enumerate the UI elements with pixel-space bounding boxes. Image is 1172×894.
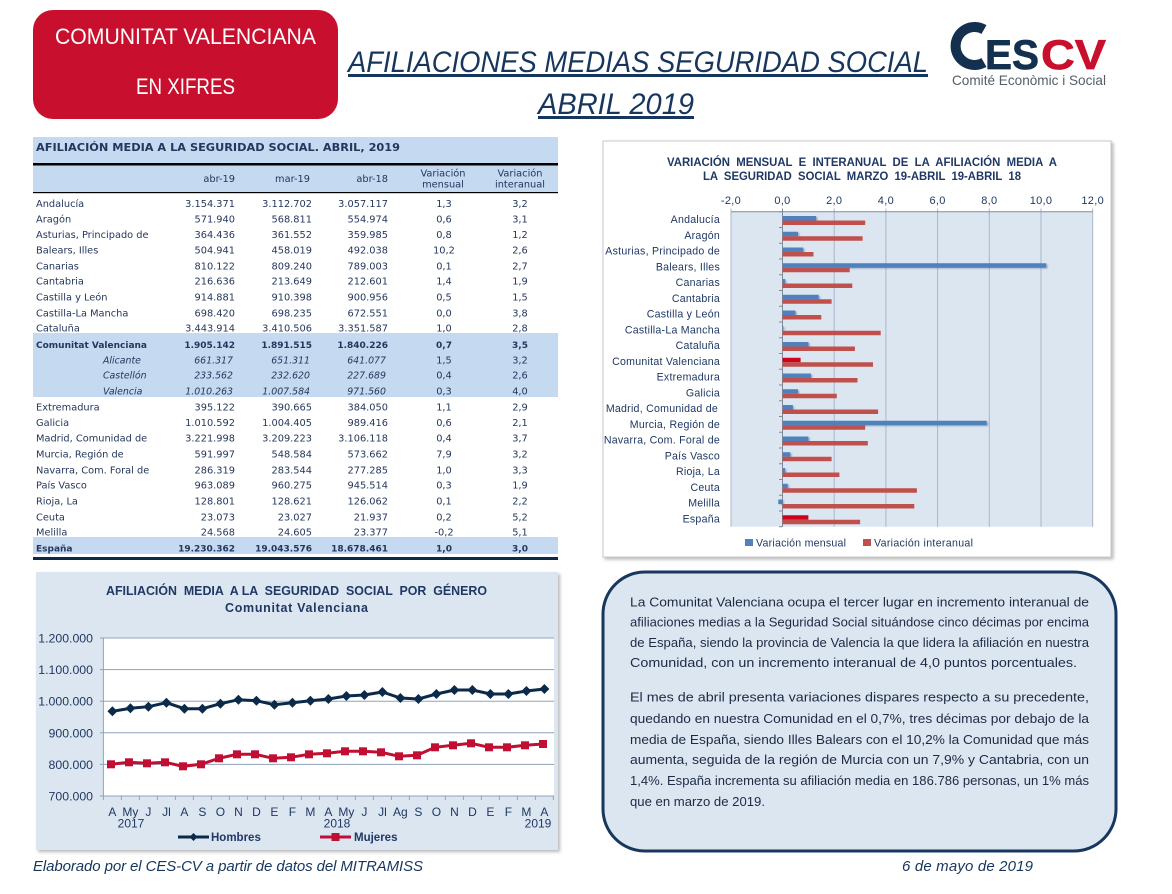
- table rows: España: [36, 544, 73, 554]
- bar chart category labels: Madrid, Comunidad de: [606, 403, 718, 415]
- table title: AFILIACIÓN MEDIA A LA SEGURIDAD SOCIAL. ABRIL, 2019: [36, 141, 400, 154]
- table rows: Alicante: [102, 356, 141, 366]
- table rows: 1,9: [512, 276, 528, 288]
- line chart x axis labels: Jl: [378, 805, 387, 819]
- bars: variación interanual: [782, 220, 917, 524]
- paragraph 2: [630, 690, 1090, 809]
- table rows: 554.974: [347, 214, 388, 226]
- line: Mujeres: [111, 743, 543, 766]
- table column headers: [203, 168, 545, 190]
- table rows: 2,6: [512, 246, 528, 256]
- table rows: Comunitat Valenciana: [36, 341, 147, 351]
- line chart x axis labels: Jl: [162, 805, 171, 819]
- highlighted bars: Comunitat Valenciana and España: [782, 358, 808, 520]
- bar chart category labels: Comunitat Valenciana: [612, 356, 720, 368]
- table rows: 3.106.118: [338, 434, 388, 444]
- table rows: 1.010.263: [185, 386, 233, 398]
- bar chart value axis labels: 2,0: [826, 195, 842, 207]
- bar chart legend: [745, 538, 973, 550]
- table rows: 568.811: [271, 214, 312, 226]
- table rows: 3.410.506: [262, 324, 312, 334]
- line chart x axis labels: [108, 805, 552, 830]
- table rows: 0,3: [436, 386, 452, 398]
- table rows: 1,1: [436, 402, 452, 414]
- paragraph 1: Comunidad, con un incremento interanual de 4,0 puntos porcentuales.: [630, 655, 1077, 670]
- table rows: Castilla y León: [36, 292, 108, 304]
- table rows: 1,4: [436, 276, 452, 288]
- table rows: Asturias, Principado de: [36, 230, 149, 241]
- line chart x axis labels: S: [414, 805, 422, 819]
- table rows: 7,9: [436, 450, 452, 460]
- table column headers: Variación: [420, 168, 466, 180]
- table rows: 361.552: [271, 230, 312, 241]
- bar chart value axis labels: -2,0: [721, 195, 741, 207]
- table rows: 0,0: [436, 308, 452, 320]
- table rows: Extremadura: [36, 402, 100, 414]
- table rows: 960.275: [271, 480, 312, 492]
- table rows: 19.043.576: [255, 544, 312, 554]
- paragraph 2: El mes de abril presenta variaciones dispares respecto a su precedente,: [630, 690, 1089, 704]
- table rows: 0,2: [436, 512, 452, 524]
- footer: date: 6 de mayo de 2019: [902, 858, 1034, 875]
- bar chart value axis labels: 6,0: [929, 195, 946, 207]
- table rows: 5,1: [512, 528, 528, 538]
- line chart y axis labels: 700.000: [49, 790, 93, 804]
- bar chart legend: Variación interanual: [874, 538, 973, 550]
- table column headers: abr-18: [356, 174, 388, 185]
- table rows: 0,4: [436, 434, 452, 444]
- bar chart category labels: Canarias: [676, 277, 720, 289]
- table rows: Andalucía: [36, 198, 84, 210]
- line chart x axis labels: M: [305, 805, 315, 819]
- bar chart category labels: Melilla: [688, 498, 720, 510]
- table rows: 971.560: [347, 386, 386, 398]
- red badge: Comunitat Valenciana en xifres: EN XIFRES: [136, 74, 235, 99]
- table rows: 573.662: [347, 450, 388, 460]
- line chart x axis labels: A: [324, 805, 332, 819]
- table rows: 0,7: [436, 341, 452, 351]
- table rows: 1.010.592: [185, 418, 235, 429]
- table rows: 0,6: [436, 418, 452, 429]
- bar chart legend: Variación mensual: [756, 538, 846, 550]
- table rows: Castellón: [103, 370, 147, 382]
- table rows: 963.089: [194, 480, 235, 492]
- line chart x axis labels: J: [361, 805, 367, 819]
- bar chart category labels: Ceuta: [690, 482, 720, 494]
- table rows: 698.420: [194, 308, 235, 320]
- line chart y axis labels: 800.000: [49, 758, 93, 772]
- bar chart value axis labels: 0,0: [774, 195, 791, 207]
- main title: ABRIL 2019: [536, 88, 694, 121]
- table rows: 2,1: [512, 418, 528, 429]
- table rows: 128.621: [271, 496, 312, 508]
- table rows: 364.436: [194, 230, 235, 241]
- bars: variación mensual: [778, 216, 1046, 504]
- main title: [346, 46, 928, 121]
- table rows: 1,2: [512, 230, 528, 241]
- bar chart value axis labels: 8,0: [981, 195, 997, 207]
- bar chart category labels: Balears, Illes: [656, 261, 720, 273]
- table rows: 2,2: [512, 496, 528, 508]
- table rows: 10,2: [433, 246, 455, 256]
- bar chart category labels: País Vasco: [665, 450, 720, 462]
- bar chart title: [667, 156, 1057, 183]
- bar chart title: LA SEGURIDAD SOCIAL MARZO 19-ABRIL 19-ABRIL 18: [703, 171, 1022, 183]
- table rows: 0,3: [436, 480, 452, 492]
- table rows: 3,0: [512, 544, 528, 554]
- table rows: 213.649: [271, 276, 312, 288]
- line chart x axis labels: N: [234, 805, 243, 819]
- bar chart category labels: Navarra, Com. Foral de: [604, 435, 720, 447]
- red badge: Comunitat Valenciana en xifres: COMUNITAT VALENCIANA: [55, 24, 316, 49]
- paragraph 2: aumenta, seguida de la región de Murcia con un 7,9% y Cantabria, con un: [630, 752, 1089, 767]
- table rows: 641.077: [347, 356, 386, 366]
- line chart x axis labels: N: [450, 805, 459, 819]
- table rows: 1,5: [512, 292, 528, 304]
- table rows: 2,9: [512, 402, 528, 414]
- table rows: Galicia: [36, 418, 69, 429]
- table rows: 910.398: [271, 292, 312, 304]
- table rows: 23.073: [201, 512, 235, 524]
- table rows: 1,3: [436, 199, 452, 210]
- bar chart category labels: Murcia, Región de: [630, 419, 720, 431]
- bar chart category labels: Galicia: [686, 387, 720, 399]
- paragraph 1: afiliaciones medias a la Seguridad Social situándose cinco décimas por encima: [630, 614, 1090, 630]
- line chart x axis labels: O: [216, 805, 225, 819]
- table rows: 0,4: [436, 370, 452, 382]
- footer: source: Elaborado por el CES-CV a partir de datos del MITRAMISS: [33, 858, 423, 875]
- table rows: 989.416: [347, 418, 388, 429]
- table rows: 458.019: [271, 246, 312, 256]
- line chart x axis labels: My: [122, 805, 138, 819]
- paragraph 2: media de España, siendo Illes Balears con el 10,2% la Comunidad que más: [630, 732, 1090, 747]
- table rows: 3.154.371: [185, 199, 235, 210]
- line chart x axis labels: A: [180, 805, 188, 819]
- text box: commentary: [603, 572, 1116, 851]
- table rows: Balears, Illes: [36, 246, 98, 256]
- table rows: 23.027: [278, 512, 312, 524]
- line chart y axis labels: [38, 632, 93, 804]
- table rows: 3,7: [512, 434, 528, 444]
- table rows: País Vasco: [36, 480, 87, 492]
- table rows: 3,2: [512, 450, 528, 460]
- table rows: 0,6: [436, 214, 452, 226]
- bar chart category labels: Castilla y León: [647, 309, 720, 321]
- table rows: 3,2: [512, 199, 528, 210]
- table rows: Murcia, Región de: [36, 448, 124, 460]
- table rows: 3.221.998: [185, 434, 235, 444]
- table rows: 3.351.587: [338, 324, 388, 334]
- table rows: 283.544: [271, 466, 312, 476]
- table rows: 591.997: [194, 450, 235, 460]
- table rows: 128.801: [194, 496, 235, 508]
- line chart title: AFILIACIÓN MEDIA A LA SEGURIDAD SOCIAL POR GÉNERO: [106, 583, 487, 598]
- table rows: 3,5: [512, 341, 528, 351]
- table rows: 672.551: [347, 308, 388, 320]
- bar chart value axis labels: 12,0: [1081, 195, 1104, 207]
- table rows: 1.840.226: [337, 341, 388, 351]
- table rows: 3.057.117: [338, 199, 388, 210]
- table rows: Madrid, Comunidad de: [36, 434, 147, 444]
- table rows: 390.665: [271, 402, 312, 414]
- bar chart category labels: Extremadura: [657, 372, 720, 384]
- table rows: 0,8: [436, 230, 452, 241]
- line chart legend: Hombres: [211, 832, 261, 844]
- table rows: 1,0: [436, 466, 452, 476]
- line chart x axis labels: D: [252, 805, 261, 819]
- table column headers: mensual: [422, 180, 464, 190]
- table rows: 216.636: [194, 276, 235, 288]
- table rows: 3,8: [512, 308, 528, 320]
- bar chart category labels: Andalucía: [671, 214, 720, 226]
- table rows: 1,0: [436, 324, 452, 334]
- table rows: 3,1: [512, 214, 528, 226]
- table rows: 212.601: [347, 276, 388, 288]
- table: afiliación media: [33, 137, 558, 560]
- table rows: Ceuta: [36, 512, 65, 524]
- bar chart category labels: Cataluña: [676, 340, 720, 352]
- table rows: 1,5: [436, 356, 452, 366]
- line chart x axis labels: E: [486, 805, 494, 819]
- table column headers: abr-19: [203, 174, 235, 185]
- line chart x axis labels: S: [198, 805, 206, 819]
- table rows: 2,8: [512, 324, 528, 334]
- table rows: 3.209.223: [262, 434, 312, 444]
- table rows: [36, 198, 528, 554]
- table rows: 810.122: [194, 262, 235, 272]
- line chart y axis labels: 1.100.000: [38, 663, 93, 677]
- bar chart category labels: Castilla-La Mancha: [625, 324, 720, 336]
- line chart x axis labels: A: [540, 805, 548, 819]
- table rows: Navarra, Com. Foral de: [36, 466, 149, 476]
- table rows: 277.285: [347, 466, 388, 476]
- table rows: 4,0: [512, 386, 528, 398]
- table rows: 1.905.142: [184, 341, 235, 351]
- bar chart value axis labels: 10,0: [1030, 195, 1052, 207]
- logo: CES CV: Comité Econòmic i Social: [952, 72, 1106, 88]
- table rows: 2,7: [512, 262, 528, 272]
- bar chart category labels: [604, 214, 720, 525]
- table rows: 914.881: [194, 292, 235, 304]
- table rows: 24.605: [278, 528, 312, 538]
- line chart x axis labels: 2018: [324, 816, 351, 830]
- paragraph 2: 1,4%. España incrementa su afiliación media en 186.786 personas, un 1% más: [630, 773, 1089, 788]
- table rows: 232.620: [271, 370, 310, 382]
- table rows: 0,5: [436, 292, 452, 304]
- table rows: 1.891.515: [261, 341, 312, 351]
- table rows: 789.003: [347, 262, 388, 272]
- panel: bar chart variación mensual e interanual: [603, 141, 1111, 557]
- bar chart category labels: Aragón: [684, 230, 720, 242]
- table column headers: Variación: [497, 168, 543, 180]
- table rows: 504.941: [194, 246, 235, 256]
- bar chart category labels: Asturias, Principado de: [605, 246, 720, 258]
- line chart x axis labels: O: [432, 805, 441, 819]
- line chart x axis labels: J: [145, 805, 151, 819]
- bar chart category labels: Rioja, La: [676, 466, 720, 478]
- paragraph 2: que en marzo de 2019.: [630, 794, 765, 809]
- table rows: 233.562: [194, 370, 233, 382]
- line chart y axis labels: 900.000: [49, 726, 93, 740]
- bar chart category labels: Cantabria: [672, 293, 720, 305]
- line chart y axis labels: 1.000.000: [38, 694, 93, 708]
- bar chart value axis labels: 4,0: [878, 195, 894, 207]
- table rows: 661.317: [194, 356, 233, 366]
- table rows: 3.112.702: [262, 199, 312, 210]
- table rows: Valencia: [103, 386, 143, 398]
- table rows: 1.007.584: [262, 386, 310, 398]
- table rows: 23.377: [354, 528, 388, 538]
- table rows: 126.062: [347, 496, 388, 508]
- table rows: 492.038: [347, 246, 388, 256]
- table rows: 3.443.914: [185, 324, 235, 334]
- line chart x axis labels: D: [468, 805, 477, 819]
- paragraph 2: quedando en nuestra Comunidad en el 0,7%, tres décimas por debajo de la: [630, 711, 1090, 726]
- paragraph 1: [630, 594, 1090, 670]
- logo: CES CV: CV: [1041, 31, 1106, 78]
- table rows: 0,1: [436, 496, 452, 508]
- table rows: 0,1: [436, 262, 452, 272]
- line chart title: [106, 583, 487, 615]
- line chart x axis labels: 2019: [525, 816, 552, 830]
- paragraph 1: de España, siendo la provincia de Valencia la que lidera la afiliación en nuestra: [630, 635, 1090, 650]
- table column headers: mar-19: [275, 174, 310, 185]
- table rows: 809.240: [271, 262, 312, 272]
- line chart legend: Mujeres: [354, 832, 397, 844]
- table rows: 3,3: [512, 466, 528, 476]
- table rows: 571.940: [194, 214, 235, 226]
- line chart x axis labels: 2017: [118, 816, 145, 830]
- table rows: 900.956: [347, 292, 388, 304]
- line chart x axis labels: A: [108, 805, 116, 819]
- table rows: 384.050: [347, 402, 388, 414]
- table rows: Melilla: [36, 528, 67, 538]
- table rows: Rioja, La: [36, 496, 78, 508]
- table rows: 548.584: [271, 450, 312, 460]
- table column headers: interanual: [495, 180, 545, 190]
- table rows: 24.568: [201, 528, 235, 538]
- line chart y axis labels: 1.200.000: [38, 632, 93, 646]
- table rows: 19.230.362: [178, 544, 235, 554]
- table rows: Cantabria: [36, 276, 84, 288]
- bar chart category labels: España: [683, 513, 720, 525]
- table rows: 1,9: [512, 480, 528, 492]
- logo: CES CV: [952, 27, 1106, 88]
- red badge: Comunitat Valenciana en xifres: [33, 10, 338, 119]
- table rows: 698.235: [271, 308, 312, 320]
- paragraph 1: La Comunitat Valenciana ocupa el tercer lugar en incremento interanual de: [630, 594, 1089, 610]
- bar chart value axis labels: [721, 195, 1104, 207]
- table rows: 286.319: [194, 466, 235, 476]
- line chart x axis labels: M: [521, 805, 531, 819]
- bar chart title: VARIACIÓN MENSUAL E INTERANUAL DE LA AFILIACIÓN MEDIA A: [667, 156, 1057, 169]
- table rows: 18.678.461: [331, 544, 388, 554]
- table rows: 651.311: [271, 356, 310, 366]
- table rows: 5,2: [512, 512, 528, 524]
- line chart x axis labels: Ag: [393, 805, 408, 819]
- line chart x axis labels: E: [270, 805, 278, 819]
- table rows: -0,2: [434, 528, 454, 538]
- table rows: 3,2: [512, 356, 528, 366]
- line chart x axis labels: F: [505, 805, 512, 819]
- panel: line chart afiliación por género: [36, 572, 558, 850]
- main title: AFILIACIONES MEDIAS SEGURIDAD SOCIAL: [346, 46, 928, 79]
- table rows: 1.004.405: [262, 418, 312, 429]
- line chart legend: [178, 832, 397, 844]
- line chart x axis labels: F: [289, 805, 296, 819]
- line: Hombres: [112, 689, 544, 711]
- table rows: Canarias: [36, 262, 79, 272]
- table rows: Castilla-La Mancha: [36, 308, 128, 320]
- line chart x axis labels: My: [338, 805, 354, 819]
- table rows: 1,0: [436, 544, 452, 554]
- table rows: Aragón: [36, 214, 71, 226]
- logo: CES CV: ES: [985, 31, 1039, 78]
- table rows: 359.985: [347, 230, 388, 241]
- table rows: 395.122: [194, 402, 235, 414]
- table rows: 2,6: [512, 370, 528, 382]
- table rows: 945.514: [347, 480, 388, 492]
- table rows: Cataluña: [36, 324, 80, 334]
- table rows: 227.689: [347, 370, 386, 382]
- table rows: 21.937: [354, 512, 388, 524]
- line chart title: Comunitat Valenciana: [225, 601, 369, 615]
